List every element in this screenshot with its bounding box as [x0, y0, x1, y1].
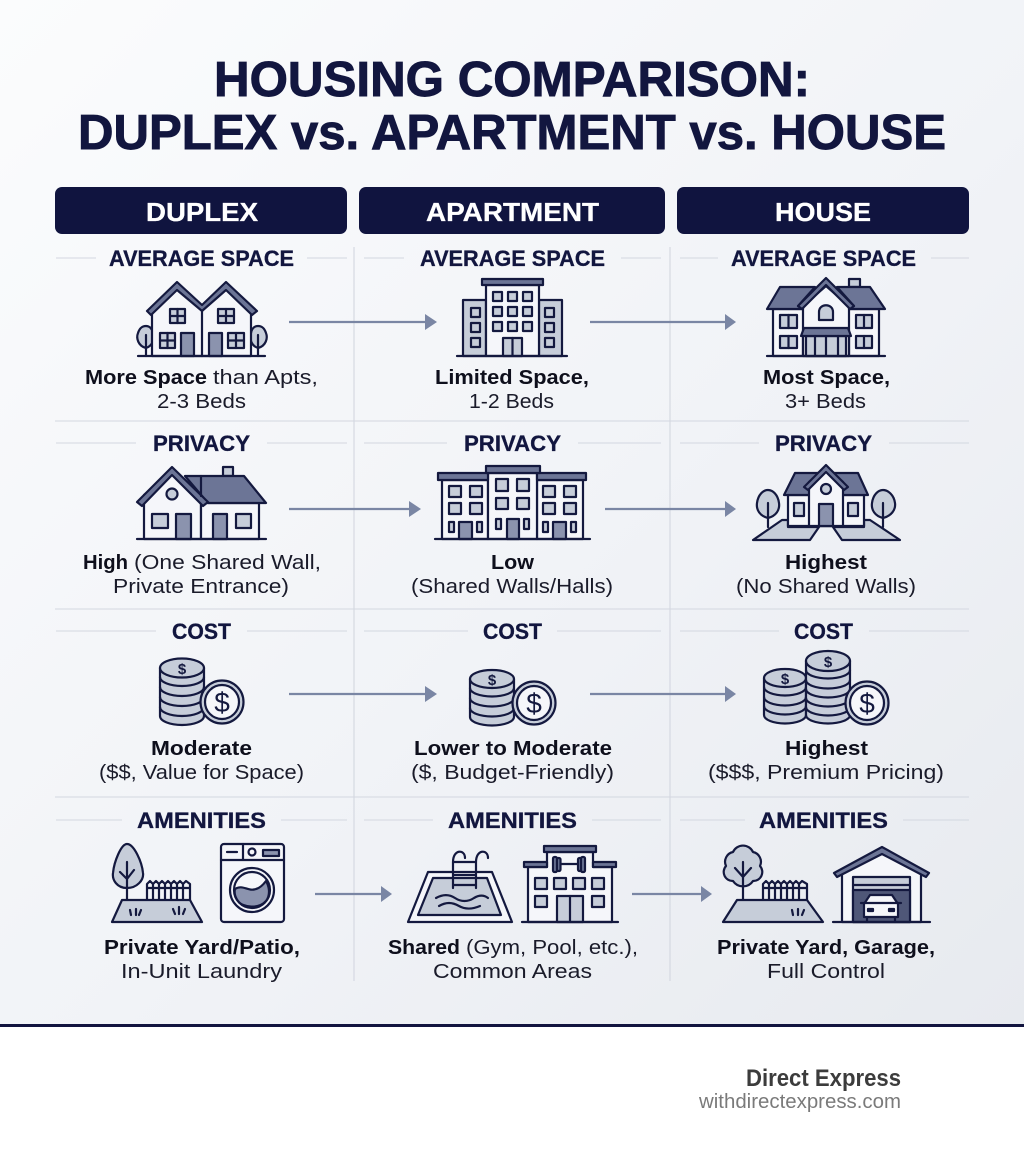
labels: amenities: Full Control	[767, 961, 885, 983]
icon: pool and gym	[408, 846, 618, 922]
labels: cost	[99, 738, 944, 784]
icon: coins highest: $	[781, 671, 790, 688]
labels: average space: 3+ Beds	[785, 391, 866, 413]
headings: amenities: AMENITIES	[448, 808, 577, 833]
arrows: cost	[289, 686, 736, 702]
icon: apartment block	[435, 466, 590, 539]
icon: yard and laundry	[112, 844, 284, 922]
labels: privacy: Low	[491, 552, 534, 574]
labels: privacy	[83, 552, 916, 598]
panel: amenities	[104, 808, 935, 983]
labels: average space	[85, 367, 890, 413]
headings: cost: COST	[483, 619, 543, 644]
labels: amenities: In-Unit Laundry	[121, 961, 282, 983]
icon: duplex side view	[137, 467, 266, 539]
icon: coins lower: $	[488, 672, 497, 689]
title: HOUSING COMPARISON:	[214, 53, 810, 107]
icon: large house	[767, 278, 885, 356]
labels: privacy: (No Shared Walls)	[736, 576, 916, 598]
title: DUPLEX vs. APARTMENT vs. HOUSE	[78, 106, 946, 160]
headings: privacy: PRIVACY	[464, 431, 561, 456]
footer brand	[698, 1065, 901, 1113]
labels: cost: Highest	[785, 738, 868, 760]
labels: average space: Limited Space,	[435, 367, 589, 389]
labels: privacy: (Shared Walls/Halls)	[411, 576, 613, 598]
labels: amenities: Common Areas	[433, 961, 592, 983]
panel: average space	[85, 246, 916, 413]
labels: average space: than Apts,	[213, 367, 318, 389]
column headers: DUPLEX	[146, 197, 259, 227]
labels: cost: ($$, Value for Space)	[99, 762, 304, 784]
labels: average space: More Space	[85, 367, 207, 389]
labels: average space: Most Space,	[763, 367, 890, 389]
panel: cost	[99, 619, 944, 784]
headings: privacy: PRIVACY	[775, 431, 872, 456]
footer brand: withdirectexpress.com	[698, 1091, 901, 1113]
headings: privacy	[153, 431, 872, 456]
labels: average space: 2-3 Beds	[157, 391, 246, 413]
icon: coins lower	[470, 670, 556, 726]
icon: duplex	[137, 282, 267, 356]
labels: average space: 1-2 Beds	[469, 391, 554, 413]
icon: coins moderate: $	[214, 687, 230, 718]
labels: amenities: Private Yard/Patio,	[104, 937, 300, 959]
labels: privacy: Private Entrance)	[113, 576, 289, 598]
icon: coins highest: $	[859, 688, 875, 719]
labels: cost: Lower to Moderate	[414, 738, 612, 760]
headings: cost: COST	[794, 619, 854, 644]
panel: privacy	[83, 431, 916, 598]
arrows: amenities	[315, 886, 712, 902]
icon: yard and garage	[723, 846, 930, 922]
icon: coins highest: $	[824, 654, 833, 671]
icon: detached house	[753, 465, 900, 540]
icon: coins lower: $	[526, 688, 542, 719]
labels: amenities: (Gym, Pool, etc.),	[466, 937, 638, 959]
column headers	[55, 187, 969, 234]
icon: coins highest	[764, 651, 888, 724]
icon: coins moderate: $	[178, 661, 187, 678]
icon: apartment building	[457, 279, 567, 356]
labels: cost: ($, Budget-Friendly)	[411, 762, 614, 784]
footer brand: Direct Express	[746, 1065, 901, 1092]
labels: privacy: Highest	[785, 552, 867, 574]
arrows: privacy	[289, 501, 736, 517]
labels: amenities	[104, 937, 935, 983]
headings: amenities: AMENITIES	[137, 808, 266, 833]
headings: average space: AVERAGE SPACE	[731, 246, 916, 271]
labels: cost: ($$$, Premium Pricing)	[708, 762, 944, 784]
title	[78, 53, 946, 160]
headings: cost	[172, 619, 854, 644]
labels: amenities: Shared	[388, 937, 460, 959]
headings: average space	[109, 246, 916, 271]
labels: privacy: High	[83, 552, 128, 574]
column headers: APARTMENT	[426, 197, 599, 227]
labels: privacy: (One Shared Wall,	[134, 552, 321, 574]
icon: coins moderate	[160, 658, 244, 725]
headings: average space: AVERAGE SPACE	[420, 246, 605, 271]
headings: amenities	[137, 808, 888, 833]
headings: amenities: AMENITIES	[759, 808, 888, 833]
arrows: average space	[289, 314, 736, 330]
labels: cost: Moderate	[151, 738, 252, 760]
labels: amenities: Private Yard, Garage,	[717, 937, 935, 959]
headings: average space: AVERAGE SPACE	[109, 246, 294, 271]
headings: privacy: PRIVACY	[153, 431, 250, 456]
column headers: HOUSE	[775, 197, 871, 227]
headings: cost: COST	[172, 619, 232, 644]
